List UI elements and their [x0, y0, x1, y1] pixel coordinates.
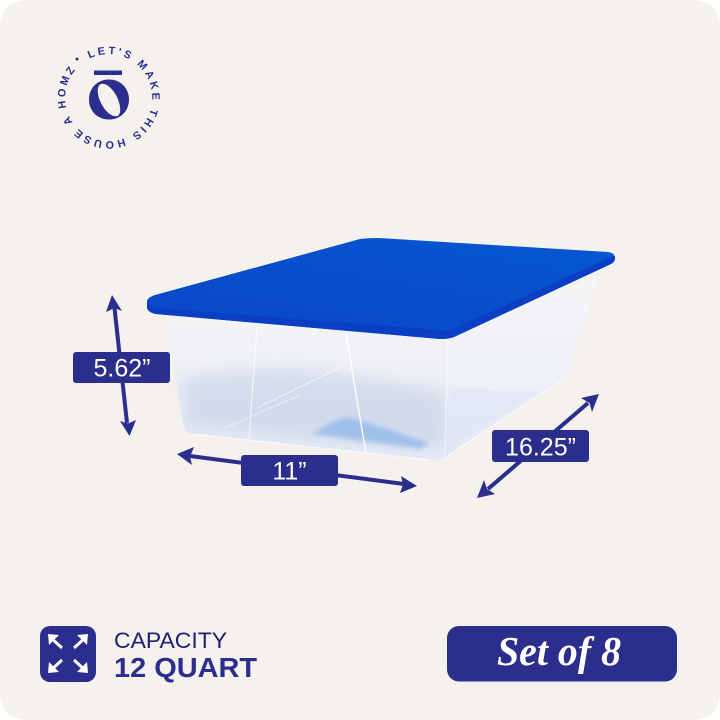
width label [241, 455, 338, 486]
bin lid [147, 238, 615, 339]
bin inner edges [192, 327, 567, 460]
logo bullet [76, 58, 78, 60]
dimension: width 11: 11” [272, 458, 307, 486]
capacity text [114, 628, 257, 683]
logo bar [94, 70, 122, 75]
dimension: length 16.25: 16.25” [505, 434, 576, 462]
height arrow [106, 295, 136, 436]
logo letter o [89, 80, 129, 120]
dimension: length 16.25 [477, 394, 599, 498]
bin body: side wall [445, 275, 599, 457]
bin body: front wall [165, 316, 447, 460]
capacity value: 12 QUART [114, 652, 257, 683]
logo: circular badge [58, 46, 160, 149]
length arrow [477, 394, 599, 498]
storage bin [147, 238, 615, 460]
icon: expand arrows [40, 626, 96, 682]
dimension: width 11 [177, 447, 417, 493]
logo ring text: LET'S MAKE THIS HOUSE A HOMZ [58, 46, 160, 149]
bin side floor [448, 388, 540, 450]
width arrow [177, 447, 417, 493]
badge: set of 8 [447, 626, 677, 682]
dimension: height 5.62 [73, 295, 170, 436]
length label [492, 430, 589, 462]
height label [73, 352, 170, 383]
lid front rim [147, 256, 615, 339]
badge: set of 8: Set of 8 [497, 628, 621, 674]
dimension: height 5.62: 5.62” [94, 354, 150, 382]
bin lid reflection [313, 417, 430, 449]
capacity label: CAPACITY [114, 628, 227, 653]
bin floor shading [180, 368, 445, 446]
